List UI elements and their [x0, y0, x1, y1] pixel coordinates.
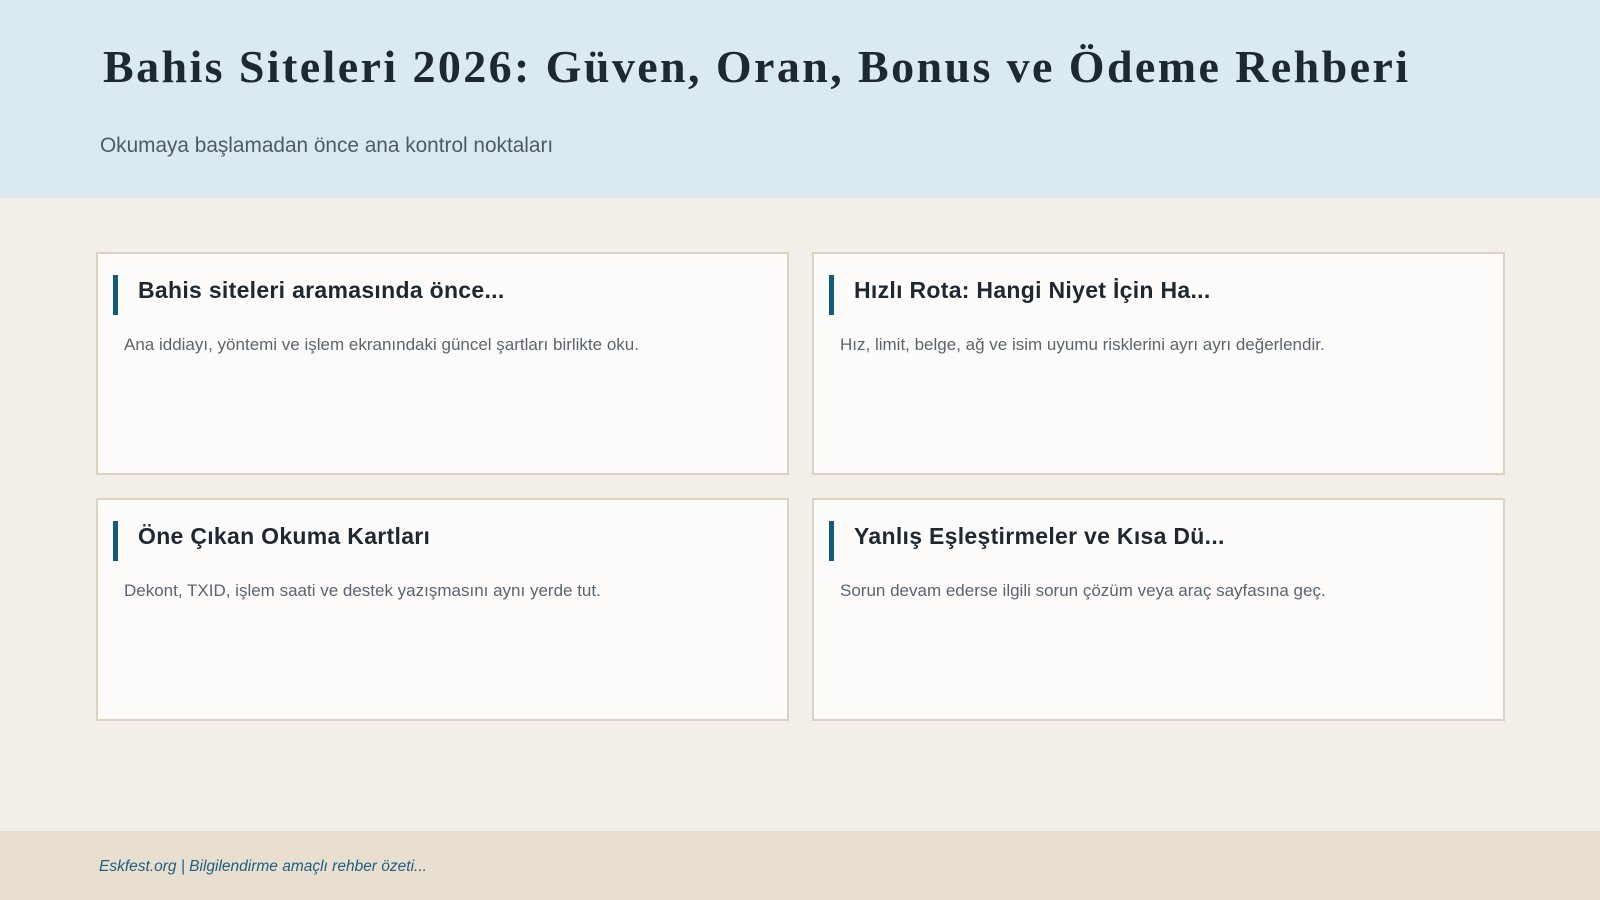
card heading: Öne Çıkan Okuma Kartları [138, 523, 430, 549]
footer text: Eskfest.org | Bilgilendirme amaçlı rehber özeti... [99, 858, 427, 875]
card heading: Yanlış Eşleştirmeler ve Kısa Dü... [854, 523, 1225, 549]
panel: card 4 [812, 498, 1505, 721]
footer band [0, 831, 1600, 900]
panel: card 3 [96, 498, 789, 721]
subtitle: Okumaya başlamadan önce ana kontrol noktaları [100, 134, 553, 157]
card heading: Bahis siteleri aramasında önce... [138, 277, 505, 303]
accent bar [113, 521, 118, 561]
accent bar [829, 275, 834, 315]
card text: Hız, limit, belge, ağ ve isim uyumu risklerini ayrı ayrı değerlendir. [840, 335, 1325, 354]
card text: Dekont, TXID, işlem saati ve destek yazışmasını aynı yerde tut. [124, 581, 601, 600]
panel: card 1 [96, 252, 789, 475]
accent bar [829, 521, 834, 561]
accent bar [113, 275, 118, 315]
card heading: Hızlı Rota: Hangi Niyet İçin Ha... [854, 277, 1211, 303]
card text: Sorun devam ederse ilgili sorun çözüm veya araç sayfasına geç. [840, 581, 1326, 600]
card text: Ana iddiayı, yöntemi ve işlem ekranındaki güncel şartları birlikte oku. [124, 335, 639, 354]
title: Bahis Siteleri 2026: Güven, Oran, Bonus ve Ödeme Rehberi [103, 41, 1410, 92]
header band [0, 0, 1600, 198]
panel: card 2 [812, 252, 1505, 475]
